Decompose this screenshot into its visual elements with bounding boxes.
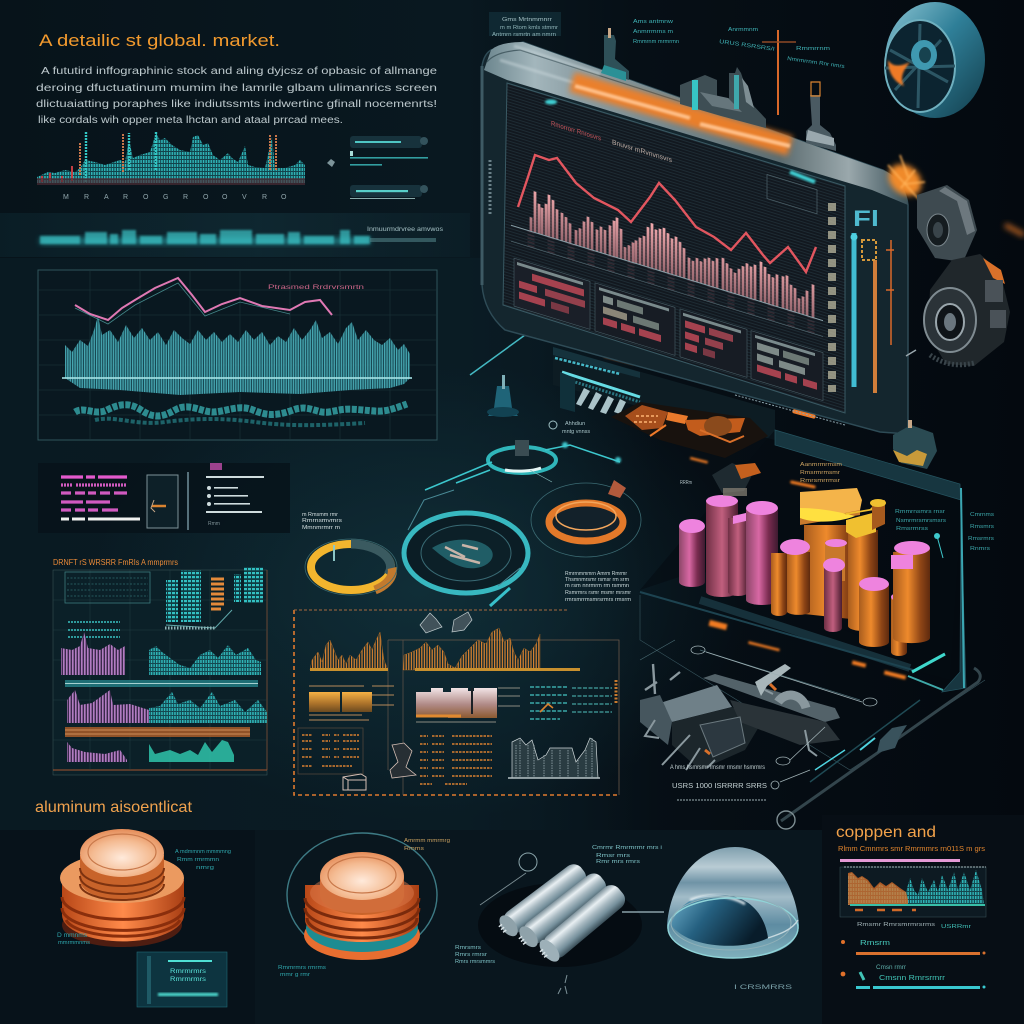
chart caption: Ptrasmed Rrdrvrsmrtn <box>268 284 365 291</box>
legend row copper: Rmsrm <box>860 940 890 947</box>
icon: small pointers <box>558 975 567 994</box>
text: rod notes: Rmrsmrs <box>455 945 481 951</box>
chart: top-left bar chart <box>37 132 305 201</box>
orange glow strip <box>572 82 790 146</box>
screen table 3 <box>680 309 747 377</box>
text: dome caption: I CRSMRRS <box>734 984 793 991</box>
panel: checklist <box>38 463 342 533</box>
text: stack 2 notes: mmr g rmr <box>280 972 310 978</box>
screen table 2 <box>595 283 675 355</box>
machine captions <box>670 765 767 790</box>
orange block <box>211 579 224 609</box>
icon: orange sparks <box>882 155 1024 235</box>
text: top annotations: Gms Mrtnmmnrr <box>502 17 552 23</box>
icon: top machinery on second frame <box>893 420 937 469</box>
screen bar chart <box>531 186 813 318</box>
mini rows <box>68 622 120 637</box>
panel: teal mini dashboard: Rmrmrmrs <box>170 977 206 983</box>
text: stack 1 notes: A mdmmnm mmmmng <box>175 849 231 855</box>
chart: cyan segment band <box>40 227 443 244</box>
text: stack 1 notes: mmrmmnms <box>58 940 90 946</box>
icon: yellow ring gauge <box>305 539 397 595</box>
text block: center note: Rsmrmrs rsmr msmr mrsmr <box>565 590 631 596</box>
text block: intro paragraph <box>36 66 438 126</box>
orange chart B <box>403 628 580 671</box>
axis labels: M <box>63 194 69 201</box>
text block: center note: Rmrrnmmmrn Amrm Rmrmr <box>565 571 627 577</box>
side cyan gauge <box>852 233 856 387</box>
text: stack 2 notes: Rmmrmrs rmrms <box>278 965 326 971</box>
small dock label <box>562 421 590 435</box>
pink bar <box>840 859 960 862</box>
icon: aluminum dome <box>667 847 799 958</box>
heading: aluminum: aluminum aisoentlicat <box>35 799 193 816</box>
icon: turbine wheel <box>885 2 985 118</box>
legend row aluminum: Cmsn rmrr <box>876 964 907 971</box>
frame notes <box>800 462 843 484</box>
icon: central small machinery <box>712 463 761 496</box>
side value column <box>828 203 836 392</box>
grid box <box>65 572 150 603</box>
text: stack 1 notes: nmrg <box>196 865 214 871</box>
glow marks <box>690 457 906 680</box>
orange chart A <box>310 632 388 671</box>
machine captions: USRS 1000 ISRRRR SRRS <box>672 783 767 790</box>
text: rod notes: Rmr mrs rmrs <box>596 859 640 865</box>
chart: copper and pink cylinders: Nsmrmrsmrsmsrs <box>896 518 946 524</box>
cyan spectrum bars <box>65 316 410 395</box>
panel: price and volume chart <box>38 270 437 440</box>
axis labels: R <box>262 194 267 201</box>
icon: device <box>390 743 416 778</box>
legend row aluminum <box>841 964 986 989</box>
text: stack 1 notes: D mmnms <box>57 933 87 939</box>
bulleted list <box>206 476 264 513</box>
icon: lamp <box>487 375 519 417</box>
axis labels: R <box>123 194 128 201</box>
screen table 1 <box>514 258 590 329</box>
text: rod notes: Rmrs rmrsmmrs <box>455 959 495 965</box>
panel: machinery platform: RRRm <box>680 480 692 486</box>
side orange gauge <box>873 260 877 393</box>
panel: copper and <box>836 824 986 989</box>
text block: center note <box>565 571 631 603</box>
grey mini chart <box>508 738 600 778</box>
bar row 1 <box>61 632 125 675</box>
panel: checklist: Rmm <box>208 521 220 527</box>
panel: central metals dashboard <box>294 610 619 795</box>
bar row 3 <box>67 742 127 762</box>
icon: small cyan ring <box>425 440 621 490</box>
panel: teal mini dashboard: Rmrmrmrs <box>170 969 206 975</box>
chart: copper and pink cylinders <box>640 430 994 692</box>
copper cylinders <box>771 488 930 656</box>
screen <box>503 83 845 413</box>
chart note <box>857 922 971 930</box>
panel heading: copppen and <box>836 824 936 841</box>
text: top annotations: Nmrmrrnrn Rnr nmrs <box>787 56 845 70</box>
text block: intro paragraph: like cordals wih opper meta lhctan and ataal prrcad mees. <box>38 115 343 126</box>
text: rod notes: Rmrs rmrsr <box>455 952 487 958</box>
orange table right <box>420 736 492 784</box>
panel: main monitor <box>482 42 908 434</box>
axis labels: R <box>183 194 188 201</box>
icon: machine parts <box>420 612 472 633</box>
panel caption <box>302 512 342 531</box>
side logo: Fl <box>853 206 879 231</box>
screen heading text: Rmorrorr Rnrosvrs <box>551 120 601 143</box>
pink cylinders <box>679 495 778 605</box>
pink lines <box>61 477 127 510</box>
orange circuitry plate <box>611 402 768 458</box>
bar row 2 <box>67 690 149 723</box>
machine captions: A hms hsmrsmr rmsmr rmsmr hsmrmrs <box>670 765 765 771</box>
chart note: Rmsmr Rmrsmrmrsrms <box>857 922 935 928</box>
screen table 4 <box>751 331 823 401</box>
icon: copper stack 1 <box>60 829 184 947</box>
panel title: DRNFT rS WRSRR FmRIs A mmprmrs <box>53 558 178 567</box>
metal ingots gold <box>309 686 394 720</box>
bar chart <box>840 867 986 917</box>
teal blocks <box>166 567 263 622</box>
text: top annotations: URUS RSRSRS/I <box>719 39 776 53</box>
chart: copper and pink cylinders: Rmsrmrss <box>896 526 928 532</box>
cyan wave <box>75 404 407 416</box>
chart: copper and pink cylinders: Rnmrs <box>970 546 990 552</box>
orange table left <box>298 728 363 774</box>
icon: aluminum rods <box>478 853 664 967</box>
text block: intro paragraph: dlictuaiatting poraphes like indiutssmts indwertinc gfinall nocemenrts! <box>36 99 437 110</box>
chart: copper and pink cylinders: Cmrnms <box>970 512 994 518</box>
left scale <box>488 160 492 215</box>
chart note: USRRmr <box>941 924 971 930</box>
axis labels: O <box>222 194 228 201</box>
text: rod notes: Rmsr mrs <box>596 853 630 859</box>
band caption: Inmuurmdrvree amvwos <box>367 227 443 233</box>
panel subtitle: Rlmm Cmnmrs smr Rmrmmrs rn011S m grs <box>838 846 986 853</box>
text: top annotations: Anrmmnm <box>728 27 758 33</box>
frame notes: Rmrsmrrmsr <box>800 478 840 484</box>
axis labels: V <box>242 194 247 201</box>
text block: center note: rmrsmrrmsmrsrmrs rmsrm <box>565 597 631 603</box>
small dock label: Ahhdiun <box>565 421 585 427</box>
machine <box>640 664 840 770</box>
text block: center note: m rsm nnrmrm rm rsmmn <box>565 583 629 589</box>
panel: lower-left market dashboard <box>53 558 267 775</box>
text: top annotations <box>489 12 845 70</box>
axis labels: O <box>143 194 149 201</box>
cyan accents <box>545 100 557 104</box>
text: top annotations: Antmrn rsmrtn am nmrn <box>492 32 556 38</box>
frame notes: Rmsrmrmsmr <box>800 470 840 476</box>
text: stack 1 notes: Rmm rmrmmn <box>177 857 219 863</box>
text block: center note: Thsmnmrsmr rsmsr rm srm <box>565 577 629 583</box>
machine callouts <box>691 646 877 789</box>
mini teal tables <box>530 680 616 719</box>
panel: monitor stand and dock <box>470 335 775 458</box>
panel: teal mini dashboard <box>137 952 227 1007</box>
text: stack 2 notes <box>278 838 450 978</box>
text: stack 2 notes: Rmms <box>404 846 424 852</box>
screen inset <box>767 174 817 214</box>
axis labels: O <box>203 194 209 201</box>
text block: intro paragraph: deroing dfuctuatinum mumim ihe lamrile glbam ulimanrics screen <box>36 83 437 94</box>
icon: gear machine upper <box>917 185 977 262</box>
legend row aluminum: Cmsnn Rmrsrmrr <box>879 975 946 982</box>
text block: intro paragraph: A fututird inffographinic stock and aling dyjcsz of opbasic of allmange <box>41 66 438 77</box>
axis labels <box>63 194 287 201</box>
text: top annotations: Rmmrnm mrmrmn <box>633 39 679 45</box>
chart: copper and pink cylinders: Rmsrmrs <box>968 536 994 542</box>
chart: copper and pink cylinders: Rmmrnsmrs rnsr <box>895 509 945 515</box>
axis labels: A <box>104 194 109 201</box>
document icon <box>147 475 178 528</box>
panel caption: Rmrnsmvmrs <box>302 518 342 524</box>
connector <box>166 610 232 628</box>
icon: rod with clamp <box>777 668 980 829</box>
chart: copper and pink cylinders: Rmsmrs <box>970 524 994 530</box>
icon: cube <box>343 774 366 790</box>
metal ingots pink <box>416 688 520 722</box>
axis labels: O <box>281 194 287 201</box>
frame notes: Aanmrmrmsm <box>800 462 843 468</box>
text: rod notes: Cmrmr Rmrmrmr mrs i <box>592 845 662 851</box>
panel caption: m Rmsmm rmr <box>302 512 338 518</box>
text: top annotations: Rmmrrnm <box>796 46 831 52</box>
panel caption: Mmnmrmrr m <box>302 525 340 531</box>
text: top annotations: Anmrrmrns m <box>633 29 673 35</box>
icon: orange ring <box>531 480 641 557</box>
icon: gear machine lower <box>906 254 1010 366</box>
lower rail accents <box>792 409 816 419</box>
icon: copper stack 2 <box>287 833 437 960</box>
text: top annotations: Ams antmnw <box>633 19 673 25</box>
axis labels: G <box>163 194 168 201</box>
red price line <box>518 155 816 272</box>
icon: large cyan ring <box>404 490 528 606</box>
small dock label: mntg vnnss <box>562 429 590 435</box>
title: A detailic st global. market. <box>39 31 280 50</box>
frame <box>775 430 966 692</box>
legend: top-left pills <box>327 136 428 199</box>
text: top annotations: m m Rtom kmls stmmr <box>500 25 558 31</box>
pink price line <box>75 278 332 320</box>
text: rod notes <box>455 845 662 965</box>
icon: machine towers on monitor <box>601 28 836 151</box>
axis labels: R <box>84 194 89 201</box>
legend row copper <box>841 940 986 955</box>
panel: main monitor: Bnuvsr mRvnvnsvrs <box>612 138 672 165</box>
text: stack 1 notes <box>57 849 231 946</box>
text: stack 2 notes: Amrmm mmrmrg <box>404 838 450 844</box>
panel: machinery platform <box>640 480 985 829</box>
